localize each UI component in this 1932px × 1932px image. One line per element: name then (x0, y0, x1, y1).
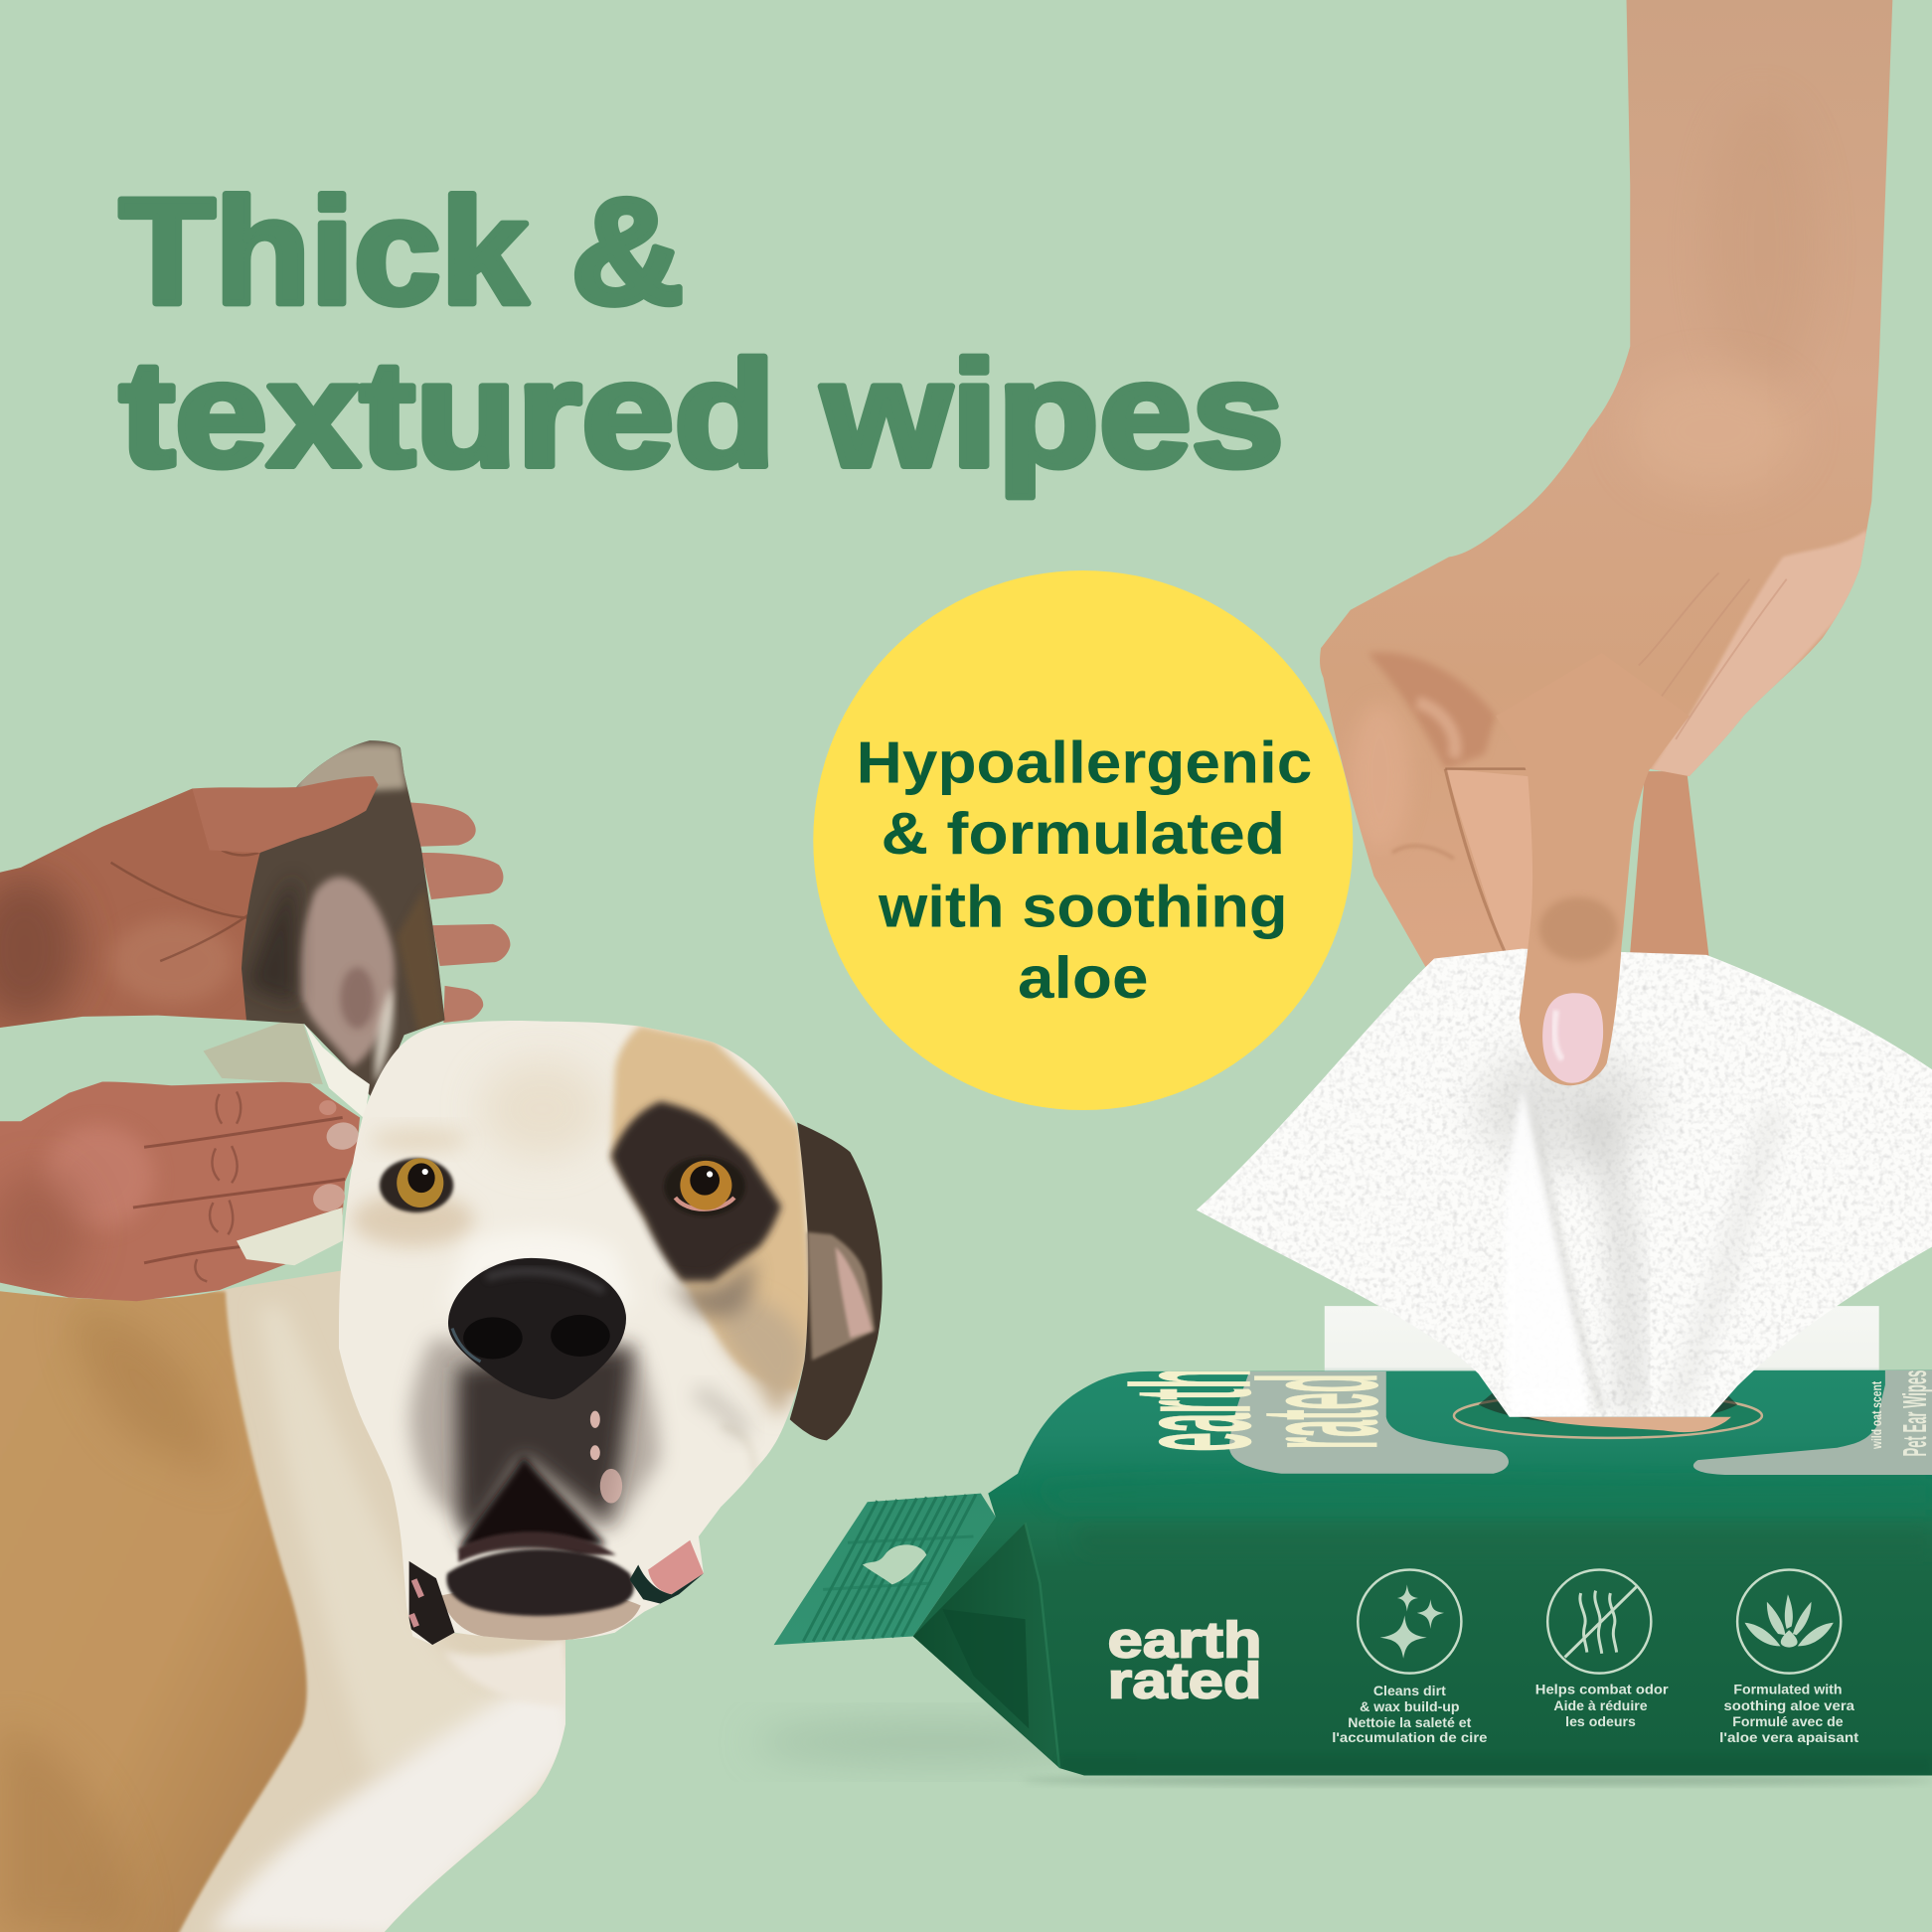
callout: hypoallergenic badge: Hypoallergenic (857, 728, 1312, 795)
oval around dispensing hole (1454, 1392, 1762, 1438)
vertical logo on top (1127, 1371, 1379, 1451)
benefit text: helps combat odor: Aide à réduire (1553, 1697, 1648, 1713)
tongue-dark upper lip (458, 1531, 616, 1562)
icon: sparkles (1358, 1570, 1461, 1674)
head (320, 1011, 826, 1651)
lower lip (446, 1549, 634, 1616)
benefit text: cleans dirt (1332, 1683, 1488, 1745)
forehead shading (481, 1059, 604, 1158)
left eye (380, 1158, 453, 1212)
callout: hypoallergenic badge: & formulated (881, 800, 1285, 867)
infographic canvas: earth (1097, 1368, 1285, 1451)
jowl fold (721, 1427, 755, 1474)
benefit text: helps combat odor: les odeurs (1565, 1713, 1636, 1729)
benefit text: cleans dirt: & wax build-up (1360, 1698, 1460, 1714)
callout: hypoallergenic badge (813, 570, 1353, 1110)
front logo (1108, 1612, 1262, 1708)
front logo: earth (1108, 1612, 1262, 1669)
white chest (210, 1658, 579, 1932)
hand pulling wipe (1320, 0, 1892, 973)
benefit text: aloe vera: Formulated with (1733, 1682, 1842, 1697)
benefit text: aloe vera: l'aloe vera apaisant (1719, 1729, 1859, 1745)
pink specks (590, 1411, 622, 1504)
benefit text: aloe vera: soothing aloe vera (1723, 1697, 1854, 1713)
far ear (790, 1122, 883, 1440)
nails (325, 1120, 361, 1152)
top sticker (1229, 1370, 1932, 1475)
callout: hypoallergenic badge: aloe (1018, 944, 1148, 1011)
callout: hypoallergenic badge: with soothing (878, 873, 1288, 939)
package body (913, 1370, 1932, 1776)
benefit text: helps combat odor (1535, 1682, 1669, 1729)
heart hole (863, 1544, 926, 1584)
crease between fingers (1368, 652, 1496, 769)
right eye (664, 1157, 745, 1216)
upper hand thumb (192, 776, 379, 853)
left jowl (409, 1561, 454, 1645)
eye patch (611, 1101, 781, 1281)
chin (441, 1587, 641, 1642)
nose (448, 1258, 626, 1399)
bottom shading (1063, 1769, 1075, 1773)
speckled grey halo (410, 1340, 659, 1540)
front logo: rated (1108, 1652, 1262, 1708)
tan coat (0, 1288, 307, 1932)
benefit text: cleans dirt: l'accumulation de cire (1332, 1729, 1488, 1745)
icon: aloe (1737, 1570, 1841, 1674)
title: textured wipes (119, 331, 1284, 499)
side fold (913, 1523, 1059, 1769)
package ground shadow (751, 1722, 1932, 1785)
benefit text: cleans dirt: Nettoie la saleté et (1348, 1714, 1472, 1730)
title (119, 168, 1284, 499)
nail (1542, 993, 1603, 1083)
back finger right of thumb (1629, 771, 1710, 967)
knuckles (195, 1091, 241, 1281)
vertical product name (1869, 1370, 1932, 1456)
highlight band (1035, 1476, 1932, 1510)
tan patch (611, 1026, 813, 1392)
benefit text: helps combat odor: Helps combat odor (1535, 1682, 1669, 1697)
dark muzzle (457, 1348, 631, 1542)
pink corner (648, 1540, 704, 1594)
middle finger (1445, 769, 1534, 973)
wipe at ear base (304, 1024, 370, 1119)
dog (0, 740, 883, 1932)
neck highlight (264, 1312, 493, 1765)
icon: no odor (1547, 1570, 1651, 1674)
benefit text: aloe vera (1719, 1682, 1859, 1745)
thumb knuckle (1539, 897, 1618, 961)
arm and back of hand (1320, 0, 1892, 973)
upper hand palm (0, 787, 358, 1028)
muzzle bridge whites (455, 1234, 624, 1299)
title: Thick & (119, 168, 684, 336)
wipe behind ear (204, 1016, 323, 1084)
upright ear (242, 740, 446, 1103)
palm side (1650, 530, 1872, 779)
upper hand fingers behind ear (404, 802, 510, 1023)
benefit text: cleans dirt: Cleans dirt (1373, 1683, 1446, 1698)
vertical product name: wild oat scent (1869, 1380, 1884, 1450)
tear tab (774, 1494, 996, 1645)
benefit text: aloe vera: Formulé avec de (1732, 1713, 1844, 1729)
infographic canvas: rated (1224, 1373, 1412, 1449)
wipes package (774, 1368, 1932, 1776)
mouth (458, 1456, 606, 1548)
lower hand (0, 1082, 361, 1301)
body (0, 1269, 591, 1932)
thumb and nail (1496, 653, 1690, 1085)
wipe in lower hand (237, 1208, 343, 1265)
wipe (1197, 949, 1932, 1423)
white wipe stack behind wipe (1325, 1306, 1879, 1377)
